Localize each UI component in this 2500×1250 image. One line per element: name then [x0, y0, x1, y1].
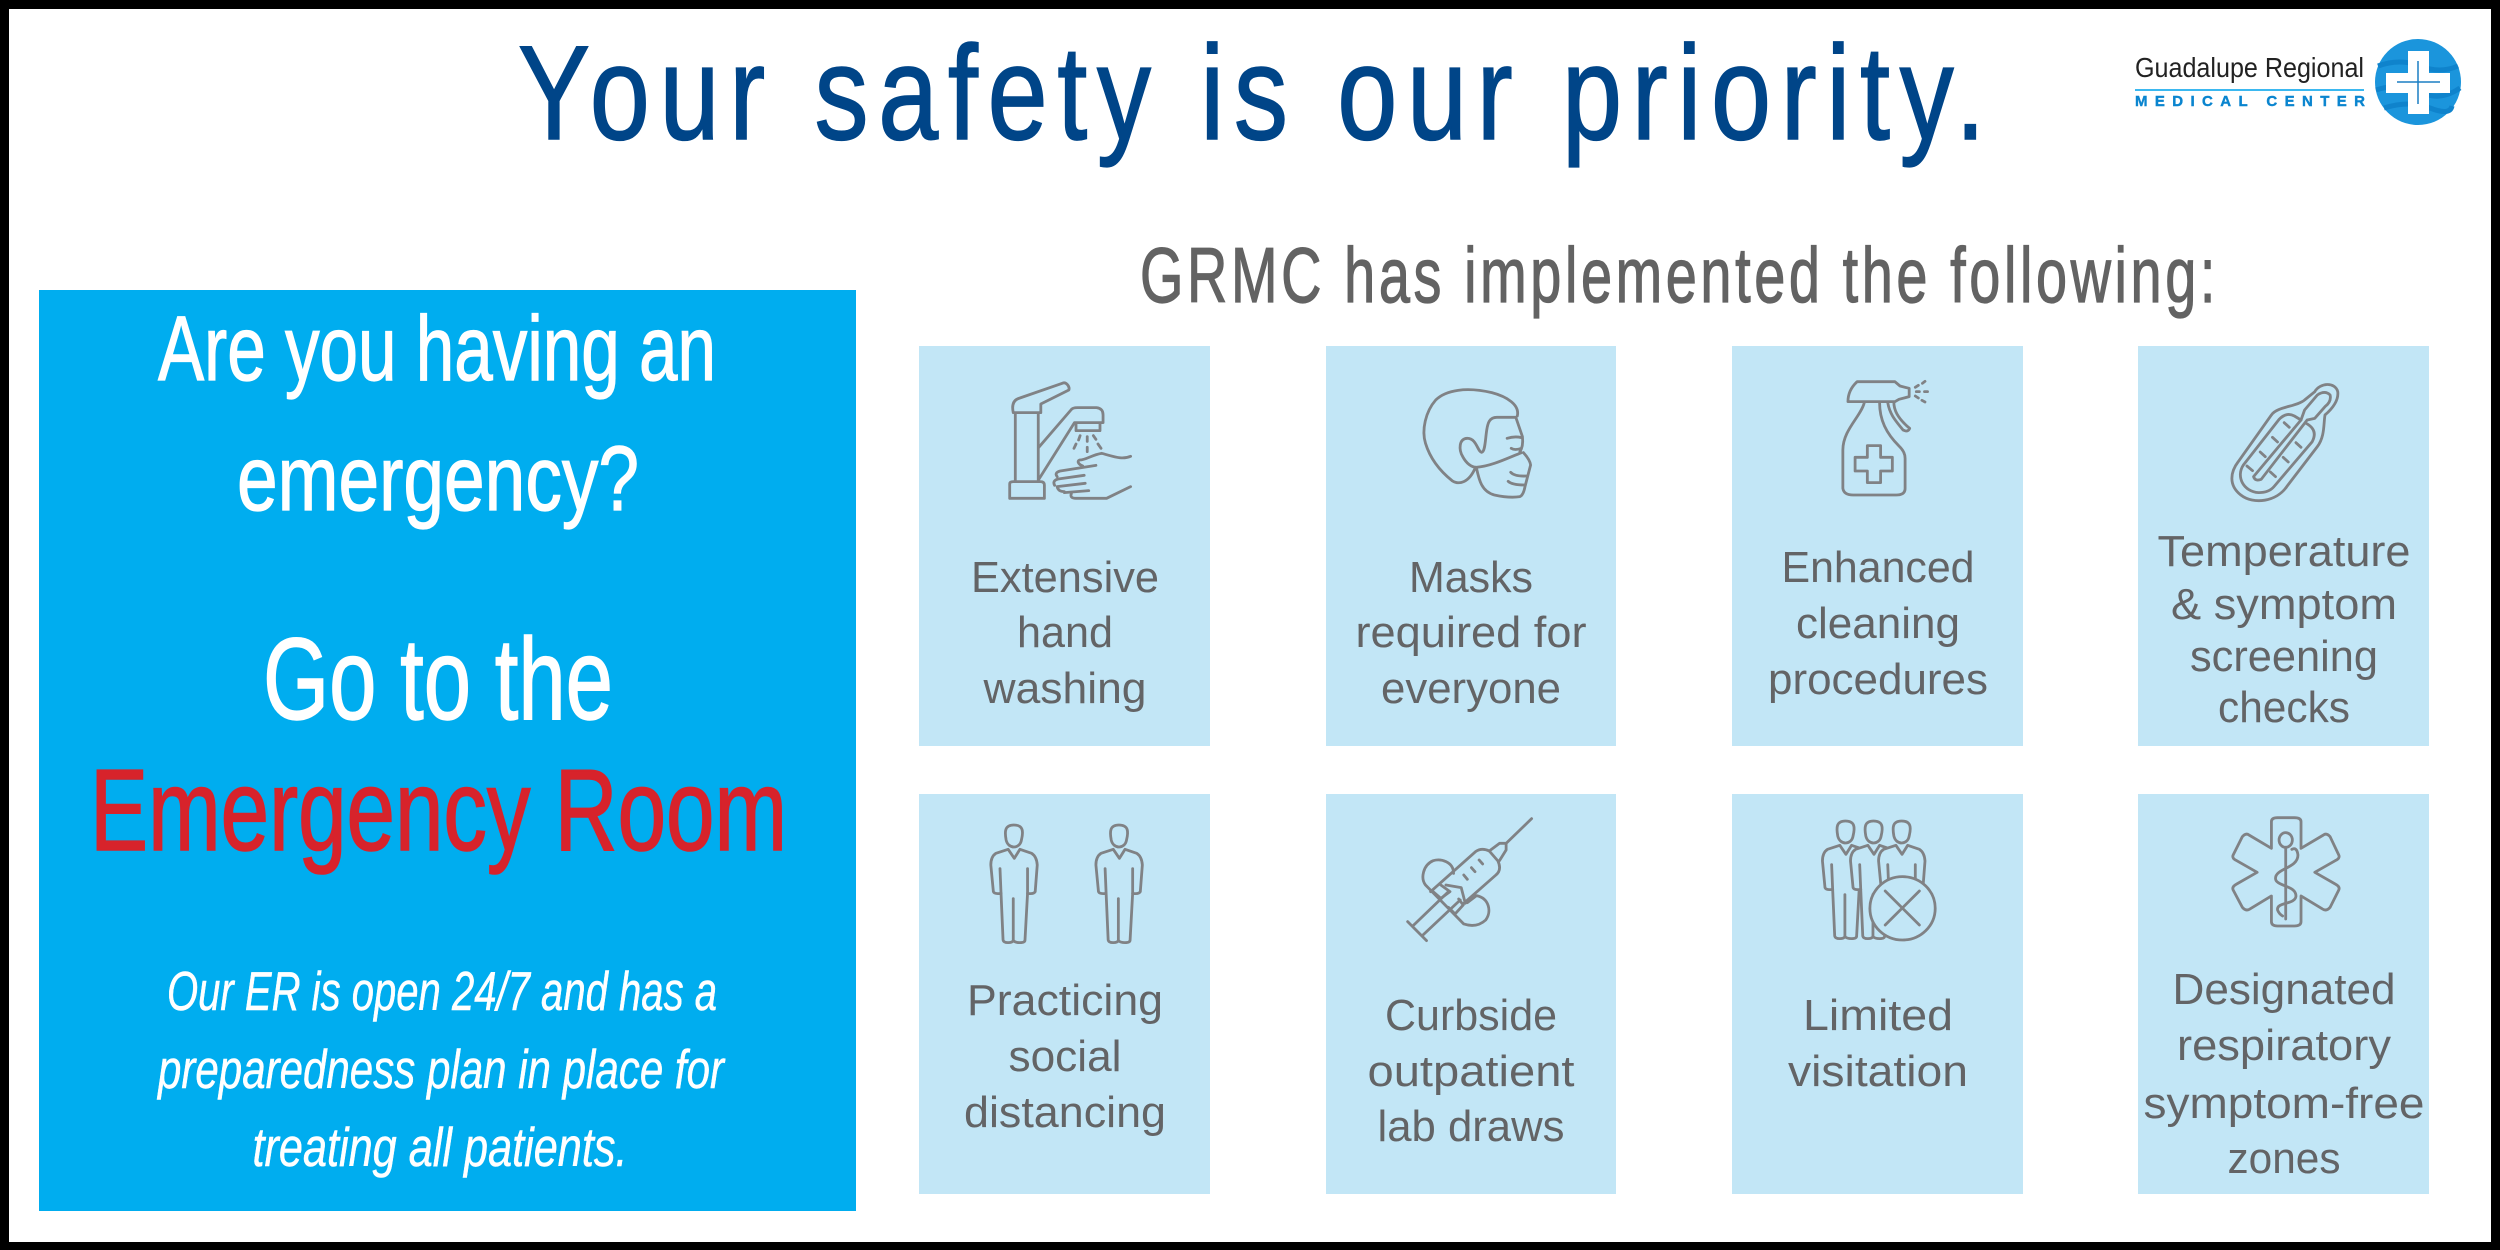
logo: Guadalupe Regional Medical Center: Guadalupe Regional: [2135, 52, 2364, 83]
label: washing: [982, 664, 1146, 713]
label: symptom-free: [2144, 1079, 2424, 1128]
label: required for: [1356, 608, 1586, 657]
instruction heading: [90, 614, 787, 875]
tile: enhanced cleaning: [1732, 346, 2023, 746]
title: Your safety is our priority.: [518, 19, 1995, 168]
label: [964, 976, 1166, 1137]
label: screening: [2190, 632, 2378, 681]
ER note: Our ER is open 24/7 and has a: [167, 960, 717, 1022]
label: Designated: [2172, 965, 2396, 1014]
tile: limited visitation: [1732, 794, 2023, 1194]
ER note: [156, 960, 726, 1178]
question heading: [158, 298, 716, 530]
label: cleaning: [1796, 599, 1960, 648]
label: & symptom: [2171, 580, 2397, 629]
label: procedures: [1768, 655, 1988, 704]
panel: emergency call-out: [39, 290, 856, 1211]
instruction heading: Go to the: [263, 614, 613, 744]
label: respiratory: [2177, 1021, 2391, 1070]
logo: Guadalupe Regional Medical Center: [2135, 39, 2461, 125]
tile: curbside lab draws: [1326, 794, 1616, 1194]
label: Practicing: [967, 976, 1163, 1025]
label: Enhanced: [1782, 543, 1974, 592]
label: [971, 553, 1159, 713]
label: everyone: [1381, 664, 1561, 713]
question heading: emergency?: [237, 428, 639, 530]
label: social: [1008, 1032, 1122, 1081]
icon: star of life: [2233, 818, 2339, 926]
label: [2158, 527, 2410, 732]
label: [1368, 991, 1574, 1151]
label: visitation: [1788, 1047, 1968, 1096]
logo: Guadalupe Regional Medical Center: MEDICAL CENTER: [2135, 93, 2365, 110]
label: distancing: [964, 1088, 1166, 1137]
label: [1356, 553, 1586, 713]
label: [2144, 965, 2424, 1183]
icon: thermometer: [2232, 385, 2338, 501]
label: [1768, 543, 1988, 704]
icon: faucet and hands: [1010, 383, 1131, 498]
label: zones: [2228, 1134, 2340, 1183]
icon: three people with crossed circle: [1822, 821, 1935, 940]
icon: head with mask: [1424, 390, 1531, 497]
label: Temperature: [2158, 527, 2410, 576]
label: outpatient: [1368, 1047, 1574, 1096]
ER note: treating all patients.: [252, 1116, 628, 1178]
label: lab draws: [1378, 1102, 1564, 1151]
label: checks: [2218, 683, 2350, 732]
tile: masks: [1326, 346, 1616, 746]
tile: social distancing: [919, 794, 1210, 1194]
icon: syringe: [1408, 819, 1532, 941]
tile: temperature screening: [2138, 346, 2429, 746]
ER note: preparedness plan in place for: [156, 1038, 726, 1100]
label: Limited: [1803, 991, 1953, 1040]
instruction heading: Emergency Room: [90, 745, 787, 875]
icon: spray bottle: [1843, 381, 1928, 495]
label: Masks: [1409, 553, 1533, 602]
label: [1788, 991, 1968, 1096]
label: Curbside: [1385, 991, 1557, 1040]
label: hand: [1017, 608, 1113, 657]
question heading: Are you having an: [158, 298, 716, 400]
label: Extensive: [971, 553, 1159, 602]
icon: two people apart: [991, 825, 1142, 943]
tile: hand washing: [919, 346, 1210, 746]
tile: respiratory symptom-free zones: [2138, 794, 2429, 1194]
